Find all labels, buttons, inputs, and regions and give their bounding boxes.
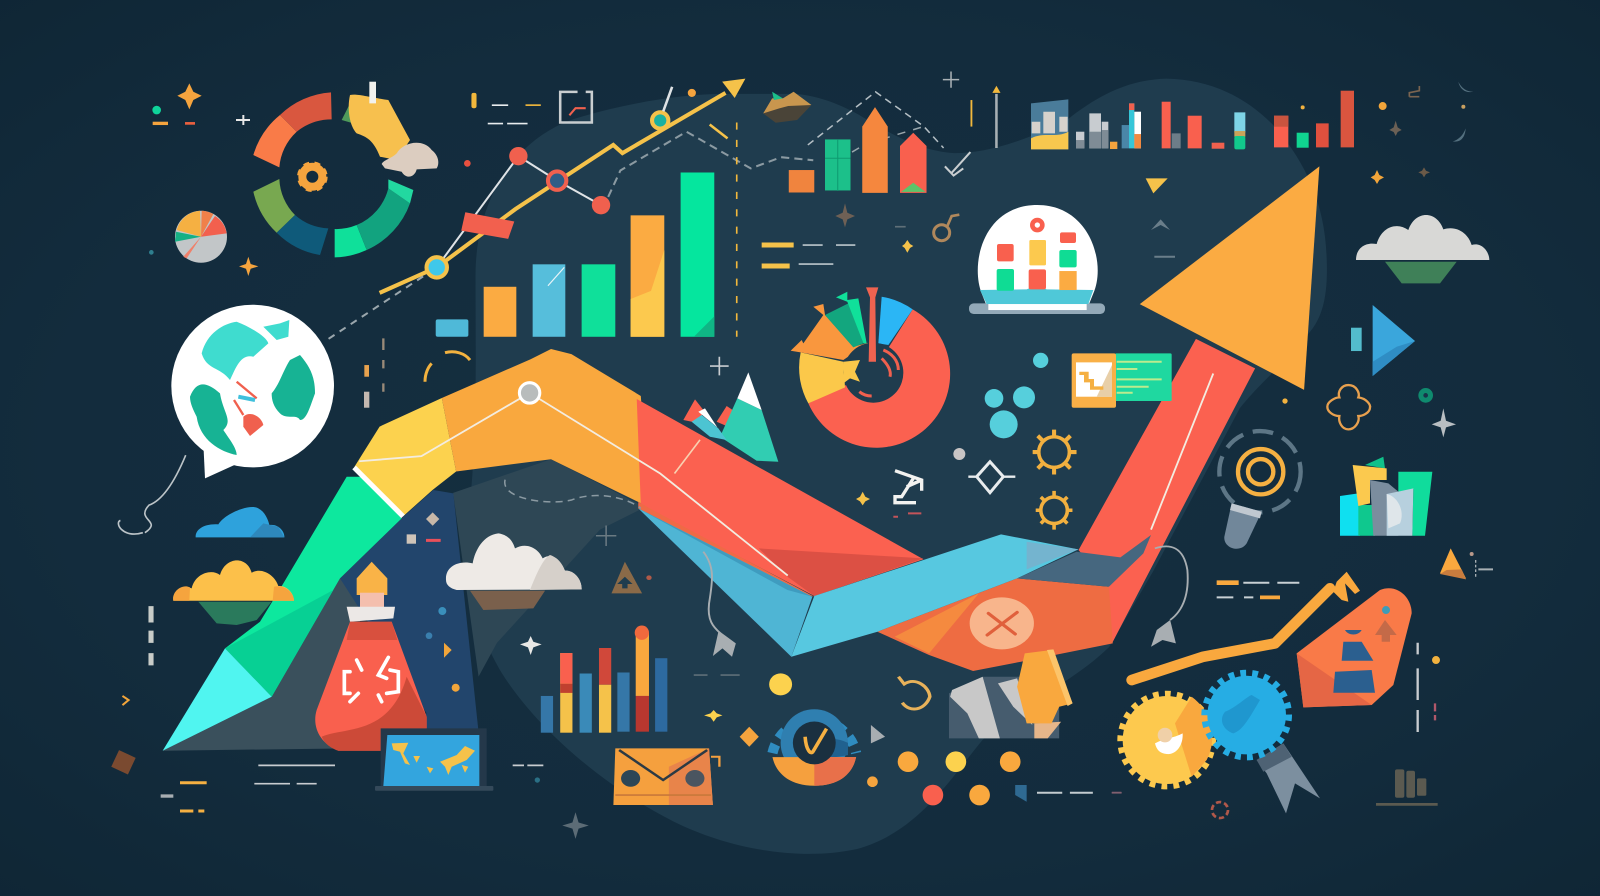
folders [1340,457,1432,536]
blue band [638,508,812,657]
icon: floating rock [763,92,811,123]
dots and diamond [694,673,1021,805]
gears bottom right with ribbon, wrench and badge [1112,572,1440,818]
blue gear [1206,674,1288,756]
blue cloud [196,507,284,537]
confetti marks [161,512,543,811]
scattered marks [111,71,1001,839]
red stem [1079,339,1255,643]
right side icons [1219,305,1493,579]
yellow gear [1122,695,1212,785]
ribbon [1257,743,1320,813]
dome icon [969,205,1105,314]
mountain icon [683,372,778,462]
donut chart [253,92,413,257]
yellow and orange band [354,398,456,516]
top right cloud [1356,215,1489,283]
target with tube [1219,431,1301,549]
icon: gear [298,163,326,191]
gears right of centre [1033,430,1077,530]
red band [637,399,923,596]
wrench line [1132,572,1360,680]
yellow cloud [173,560,294,625]
bottom dashes [1015,785,1121,802]
small marks and sparkles [149,83,471,408]
curved arrow right [1151,546,1188,647]
rock and hand icon [949,649,1073,738]
clover icon [1327,385,1370,429]
central background blob [468,79,1327,854]
card icon and cyan dots [762,203,1172,460]
undo arrow [898,677,930,709]
play arrow [1351,305,1415,376]
bottle and clouds left [161,507,582,811]
small triangle marker [1440,548,1493,579]
flower and sparkle [1282,388,1456,437]
node marker [519,383,540,403]
small marks [1112,583,1440,818]
curved arrow left [703,552,736,657]
pie chart center [791,287,950,448]
globe speech bubble [171,305,334,478]
symbols right of centre [710,357,1015,517]
highlight lines [359,393,788,576]
icon: hand with cloud [342,82,438,177]
shaded patch under the ribbon [453,459,645,677]
lower center icons and curved arrows [611,546,1188,805]
lower bar chart [541,626,667,733]
white cloud [446,533,582,610]
top center small chart and legend [471,92,592,124]
map card [375,728,493,791]
top-left cluster: donut, hand, small pie, globe [149,82,471,478]
x badge [970,597,1034,649]
main zigzag arrow [163,166,1319,751]
green band [163,477,402,751]
small pie [175,211,227,263]
lower orange band [638,508,1151,671]
orange badge [1297,588,1412,707]
ribbon shadow and navy panel [163,490,478,751]
envelope [613,748,719,805]
bottle [315,562,427,751]
arrow head [1140,166,1319,390]
house bars top [789,107,970,193]
line chart with rising arrow [329,79,944,339]
recycle triangle [611,562,652,593]
top-right mini bar strip [1031,82,1473,257]
gear with check [772,709,856,786]
bar chart center [436,122,737,337]
